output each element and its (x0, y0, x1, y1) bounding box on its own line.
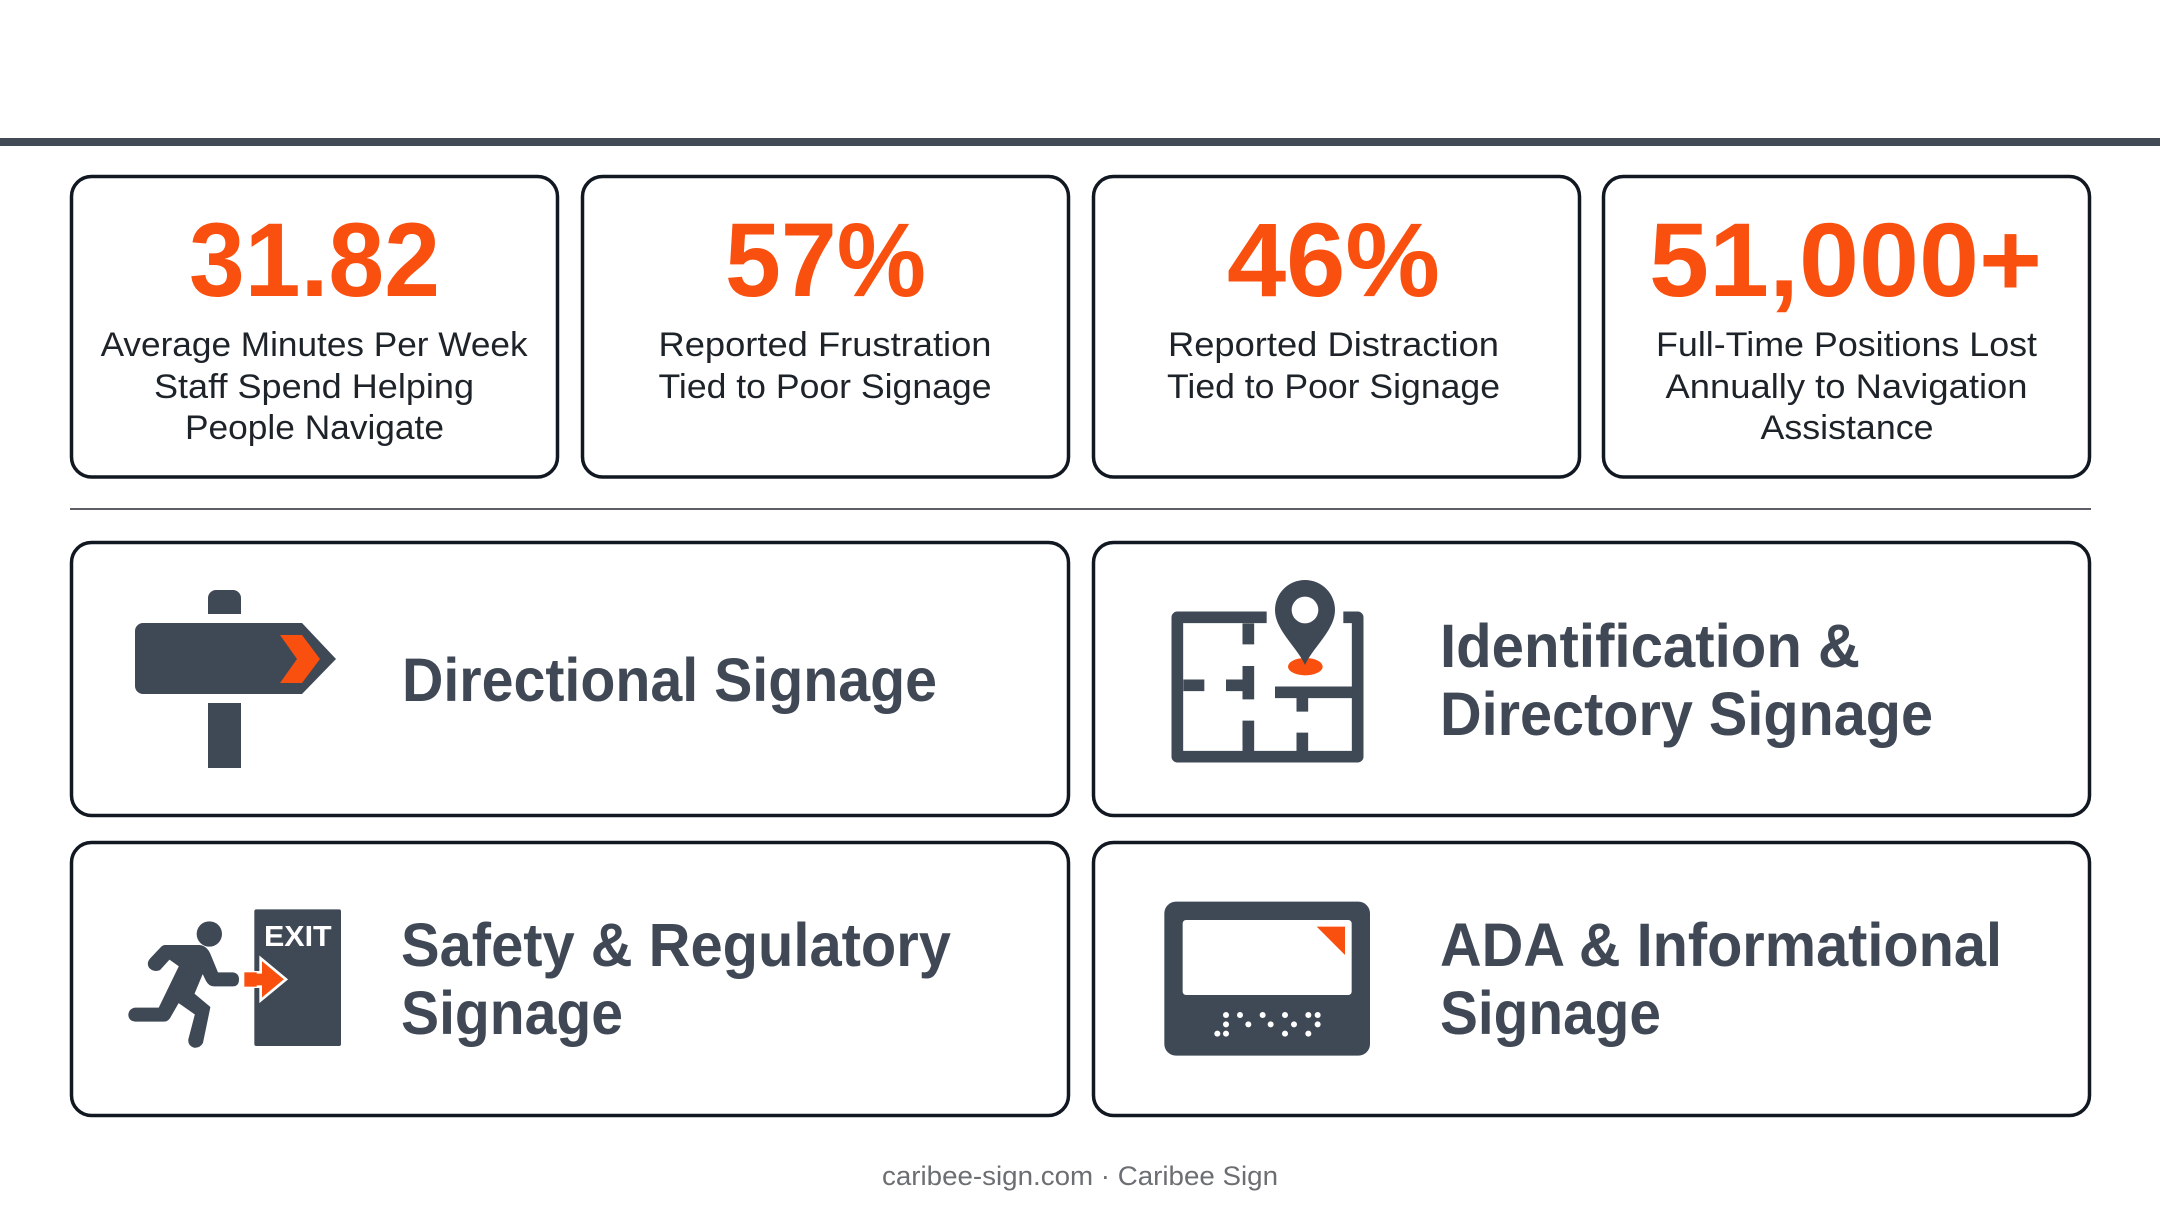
icon: directional signpost (135, 590, 336, 768)
heading: safety and regulatory signage: Signage (401, 979, 623, 1047)
stat number: 57% (725, 202, 926, 319)
panel: stat 31.82 minutes (72, 176, 558, 477)
heading: ADA and informational signage (1440, 911, 2002, 1047)
heading: identification and directory signage: Directory Signage (1440, 680, 1933, 748)
stat description: Average Minutes Per Week (101, 326, 529, 364)
stat description (658, 326, 992, 406)
heading: ADA and informational signage: Signage (1440, 979, 1661, 1047)
heading: safety and regulatory signage: Safety & Regulatory (401, 911, 951, 979)
stat description: Tied to Poor Signage (1167, 368, 1500, 406)
stat number: 46% (1227, 202, 1440, 319)
panel: stat 46% distraction (1094, 176, 1580, 477)
stat description: Assistance (1760, 409, 1934, 447)
stat number: 31.82 (189, 202, 440, 319)
icon: running person and exit door: EXIT (264, 921, 332, 953)
panel: identification and directory signage (1094, 542, 2090, 816)
panel: stat 57% frustration (582, 176, 1068, 477)
heading: directional signage: Directional Signage (402, 646, 937, 714)
stat description: Reported Distraction (1168, 326, 1499, 364)
heading: safety and regulatory signage (401, 911, 951, 1047)
icon: ADA braille sign (1164, 902, 1370, 1056)
heading: ADA and informational signage: ADA & Informational (1440, 911, 2002, 979)
stat description: Annually to Navigation (1666, 368, 2028, 406)
panel: stat 51,000+ positions (1604, 176, 2090, 477)
stat number: 51,000+ (1649, 202, 2042, 319)
heading: identification and directory signage (1440, 612, 1933, 748)
panel: ADA and informational signage (1094, 842, 2090, 1116)
top header bar (0, 138, 2160, 146)
stat description: Staff Spend Helping (154, 368, 474, 406)
stat description: Tied to Poor Signage (658, 368, 992, 406)
panel: directional signage (72, 542, 1068, 816)
stat description: Reported Frustration (658, 326, 992, 364)
stat description (101, 326, 529, 447)
stat description: Full-Time Positions Lost (1656, 326, 2038, 364)
stat description (1656, 326, 2038, 447)
stat description (1167, 326, 1500, 406)
icon: running person and exit door (129, 909, 341, 1047)
panel: safety and regulatory signage (72, 842, 1068, 1116)
icon: floor plan with map pin (1177, 580, 1358, 757)
heading: identification and directory signage: Identification & (1440, 612, 1860, 680)
stat description: People Navigate (185, 409, 444, 447)
footer credit: caribee-sign.com · Caribee Sign (882, 1161, 1278, 1191)
